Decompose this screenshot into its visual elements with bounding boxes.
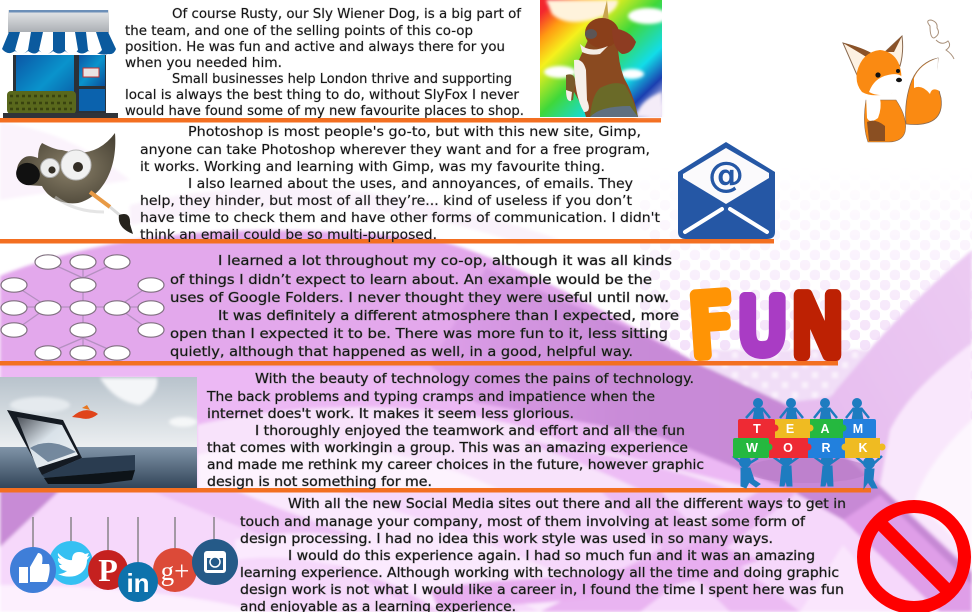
graphic: teamwork puzzle [733, 398, 886, 488]
word art: FUN: N [792, 280, 843, 375]
graphic: teamwork puzzle: E [786, 422, 794, 436]
text block: Gimp and emails: it works. Working and learning with Gimp, was my favourite thing. [140, 160, 605, 175]
text block: technology and teamwork: and made me rethink my career choices in the future, however graphic [207, 457, 704, 473]
text block: Rusty and small businesses: Of course Rusty, our Sly Wiener Dog, is a big part of [172, 7, 521, 22]
image: rainbow unicorn dog [540, 0, 668, 117]
text block: Rusty and small businesses: would have found some of my new favourite places to shop. [125, 104, 524, 119]
diagram: network of ovals [1, 255, 164, 360]
text block: Google Folders and atmosphere: quietly, although that happened as well, in a good, helpful way. [170, 344, 633, 360]
text block: Google Folders and atmosphere [170, 253, 679, 360]
graphic: teamwork puzzle: O [783, 441, 793, 455]
icon: red prohibition sign [864, 506, 964, 608]
text block: technology and teamwork: design is not something for me. [207, 474, 432, 490]
text block: Rusty and small businesses: when you needed him. [125, 56, 282, 71]
text block: social media and final thoughts: design processing. I had no idea this work style was used in so many ways. [240, 531, 773, 547]
text block: technology and teamwork: I thoroughly enjoyed the teamwork and effort and all the fun [255, 423, 685, 439]
badge: Facebook like [10, 547, 56, 593]
badge: Pinterest: P [98, 552, 118, 588]
text block: Gimp and emails: have time to check them and have other forms of communication. I didn't [140, 211, 660, 226]
icon: envelope with @ [678, 142, 775, 239]
badge: Google Plus: g+ [161, 556, 189, 586]
text block: Gimp and emails [140, 125, 660, 243]
text block: Gimp and emails: anyone can take Photoshop wherever they want and for a free program, [140, 143, 650, 158]
text block: Rusty and small businesses: the team, and one of the selling points of this co-op [125, 24, 473, 39]
text block: Google Folders and atmosphere: open than I expected it to be. There was more fun to it, less sitting [170, 326, 668, 342]
text block: technology and teamwork: that comes with workingin a group. This was an amazing experience [207, 440, 688, 456]
text block: Google Folders and atmosphere: I learned a lot throughout my co-op, although it was all kinds [218, 253, 672, 269]
icon: envelope with @: @ [708, 155, 744, 196]
text block: Gimp and emails: Photoshop is most people's go-to, but with this new site, Gimp, [188, 125, 641, 140]
badge: Twitter [49, 541, 93, 585]
orange divider lines [0, 118, 871, 492]
image: laptop and goldfish [0, 377, 197, 488]
graphic: teamwork puzzle: R [821, 441, 831, 455]
text block: Gimp and emails: I also learned about the uses, and annoyances, of emails. They [188, 177, 633, 192]
graphic: teamwork puzzle: K [858, 441, 868, 455]
badge: Instagram [192, 539, 238, 585]
text block: Google Folders and atmosphere: uses of Google Folders. I never thought they were useful until now. [170, 290, 669, 306]
icon: fox with butterfly [843, 20, 954, 142]
graphic: teamwork puzzle: A [820, 422, 830, 436]
text block: Gimp and emails: think an email could be so multi-purposed. [140, 228, 437, 243]
text block: Google Folders and atmosphere: of things I didn’t expect to learn about. An example would be the [170, 272, 652, 288]
text block: technology and teamwork: The back problems and typing cramps and impatience when the [206, 389, 655, 405]
text block: technology and teamwork: internet does't work. It makes it seem less glorious. [207, 406, 574, 422]
text block: Rusty and small businesses [125, 7, 524, 119]
graphic: teamwork puzzle: W [746, 441, 758, 455]
badge: LinkedIn: in [126, 568, 150, 598]
text block: Rusty and small businesses: position. He was fun and active and always there for you [125, 40, 505, 55]
text block: social media and final thoughts: design work is not what I would like a career in, I found the time I spent here was fun [240, 582, 844, 598]
text block: social media and final thoughts: With all the new Social Media sites out there and all the different ways to get in [288, 496, 846, 512]
text block: technology and teamwork: With the beauty of technology comes the pains of technology. [255, 371, 694, 387]
icon: Gimp mascot [13, 133, 133, 234]
word art: FUN: U [739, 284, 786, 370]
text block: social media and final thoughts: learning experience. Although working with technology all the time and doing graphic [240, 565, 839, 581]
badge: Pinterest [88, 550, 128, 590]
text block: technology and teamwork [206, 371, 704, 490]
word art: FUN: F [687, 278, 735, 375]
badge: LinkedIn [118, 562, 158, 602]
graphic: teamwork puzzle: T [753, 422, 761, 436]
text block: Rusty and small businesses: Small businesses help London thrive and supporting [172, 72, 512, 87]
text block: social media and final thoughts: touch and manage your company, most of them involving at least some form of [240, 514, 806, 530]
background swooshes [0, 124, 972, 612]
badge: Google Plus [153, 548, 197, 592]
text block: Gimp and emails: help, they hinder, but most of all they’re... kind of useless if you don’t [140, 194, 632, 209]
text block: Google Folders and atmosphere: It was definitely a different atmosphere than I expected, more [218, 308, 679, 324]
graphic: teamwork puzzle: M [853, 422, 863, 436]
icon: storefront [2, 10, 118, 118]
word art: FUN [687, 278, 843, 375]
text block: social media and final thoughts [240, 496, 846, 612]
icons: hanging social media badges [10, 517, 238, 602]
text block: social media and final thoughts: I would do this experience again. I had so much fun and it was an amazing [288, 548, 815, 564]
text block: Rusty and small businesses: local is always the best thing to do, without SlyFox I never [125, 88, 520, 103]
